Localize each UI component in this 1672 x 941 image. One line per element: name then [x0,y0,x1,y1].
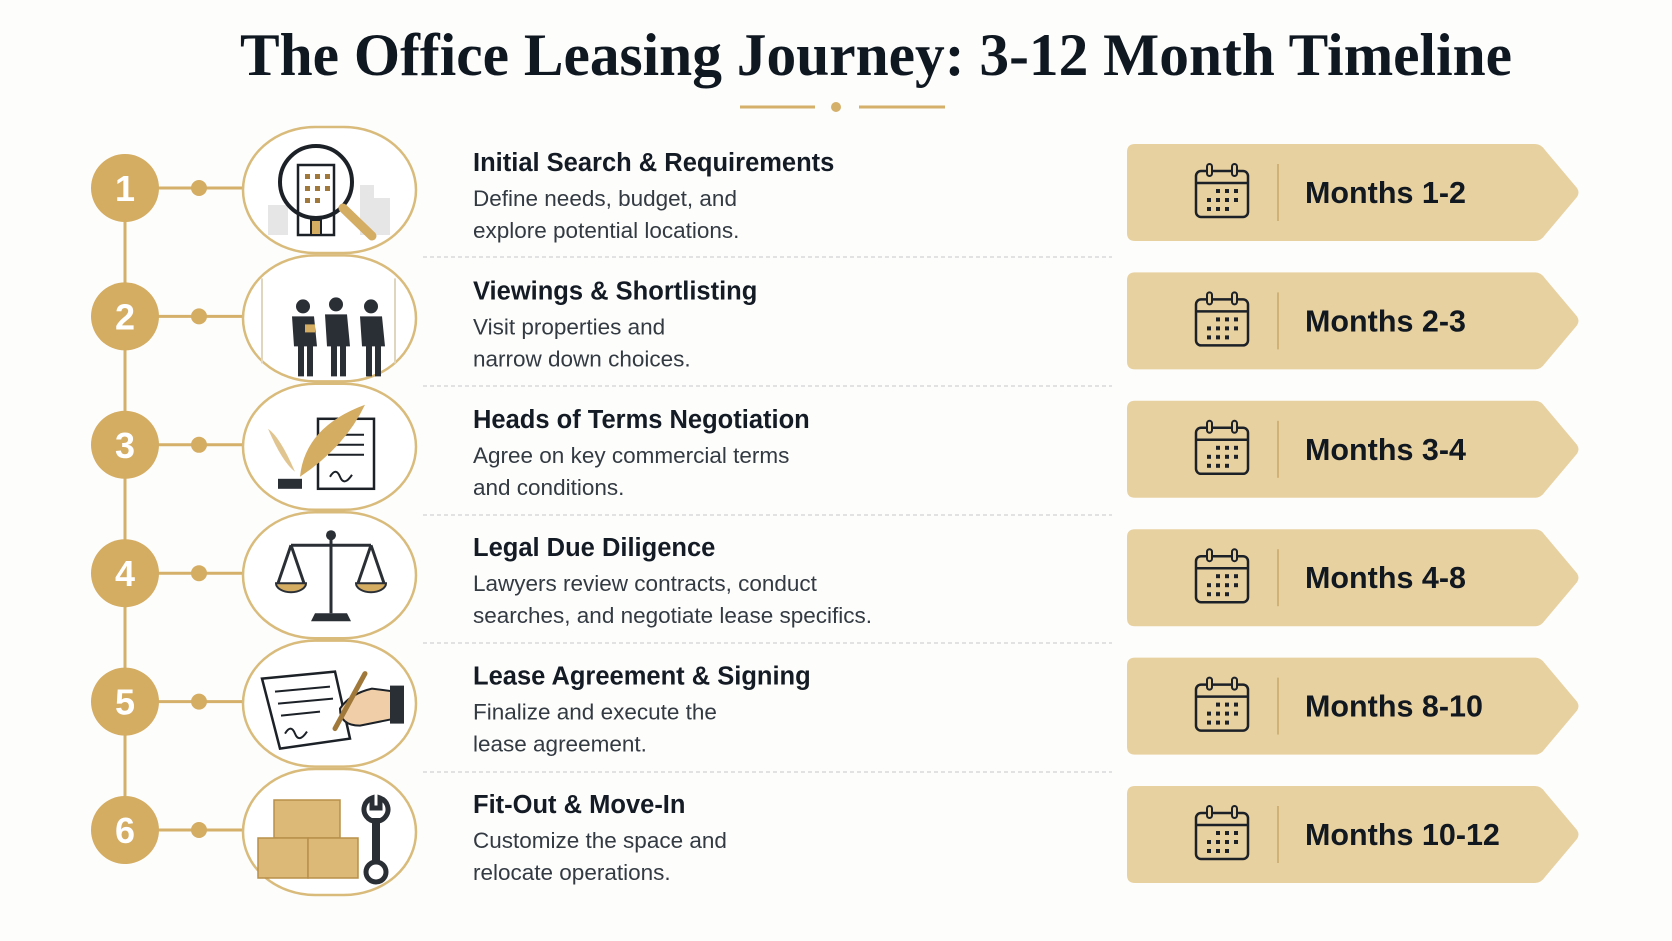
step number 3 [91,411,243,479]
text: Viewings & Shortlisting [473,277,757,371]
dividers [423,257,1112,772]
text: Heads of Terms Negotiation [473,406,810,500]
icon: scales of justice [243,512,416,638]
icon: boxes and wrench [243,769,416,895]
step number 4 [91,539,243,607]
text: Heads of Terms Negotiation: Agree on key commercial terms [473,443,789,468]
step 6 [91,769,1578,895]
icon: quill and document [243,384,416,510]
banner: Months 1-2 [1127,144,1578,241]
title ornament [740,102,945,112]
step 2 [91,255,1578,381]
banner: Months 2-3 [1127,272,1578,369]
text: Heads of Terms Negotiation: Heads of Terms Negotiation [473,406,810,434]
text: Fit-Out & Move-In: Customize the space and [473,828,727,853]
text: Initial Search & Requirements: Define needs, budget, and [473,186,737,211]
text: Lease Agreement & Signing: lease agreement. [473,732,647,757]
text: Lease Agreement & Signing: Lease Agreement & Signing [473,663,811,691]
text: Lease Agreement & Signing: Finalize and execute the [473,700,717,725]
step number 5: 5 [115,682,135,723]
text: Heads of Terms Negotiation: and conditions. [473,475,624,500]
step number 4: 4 [115,553,135,594]
text: Viewings & Shortlisting: Viewings & Shortlisting [473,277,757,305]
step 1 [91,127,1578,253]
text: Legal Due Diligence: Lawyers review contracts, conduct [473,571,818,596]
text: Fit-Out & Move-In [473,791,727,885]
title: The Office Leasing Journey: 3-12 Month Timeline [240,22,1512,88]
icon: hand signing document [243,641,416,767]
text: Initial Search & Requirements: explore potential locations. [473,218,739,243]
step number 3: 3 [115,425,135,466]
banner: Months 2-3: Months 2-3 [1305,304,1466,338]
banner: Months 8-10: Months 8-10 [1305,690,1483,724]
banner: Months 3-4: Months 3-4 [1305,433,1466,467]
step number 6: 6 [115,810,135,851]
icon: magnifier over building [243,127,416,253]
step number 1: 1 [115,168,135,209]
step 5 [91,641,1578,767]
banner: Months 10-12: Months 10-12 [1305,818,1500,852]
text: Fit-Out & Move-In: Fit-Out & Move-In [473,791,685,819]
timeline vertical line [124,188,126,830]
text: Lease Agreement & Signing [473,663,811,757]
text: Fit-Out & Move-In: relocate operations. [473,860,671,885]
banner: Months 4-8: Months 4-8 [1305,561,1466,595]
step number 2 [91,282,243,350]
text: Legal Due Diligence: Legal Due Diligence [473,534,715,562]
banner: Months 4-8 [1127,529,1578,626]
step number 2: 2 [115,296,135,337]
text: Initial Search & Requirements: Initial Search & Requirements [473,149,834,177]
icon: people viewing office [243,255,416,381]
text: Viewings & Shortlisting: narrow down choices. [473,346,691,371]
step 3 [91,384,1578,510]
step 4 [91,512,1578,638]
step number 5 [91,668,243,736]
banner: Months 8-10 [1127,658,1578,755]
banner: Months 10-12 [1127,786,1578,883]
step number 1 [91,154,243,222]
step number 6 [91,796,243,864]
text: Legal Due Diligence [473,534,872,628]
text: Initial Search & Requirements [473,149,834,243]
banner: Months 3-4 [1127,401,1578,498]
text: Legal Due Diligence: searches, and negotiate lease specifics. [473,603,872,628]
banner: Months 1-2: Months 1-2 [1305,176,1466,210]
text: Viewings & Shortlisting: Visit properties and [473,314,665,339]
